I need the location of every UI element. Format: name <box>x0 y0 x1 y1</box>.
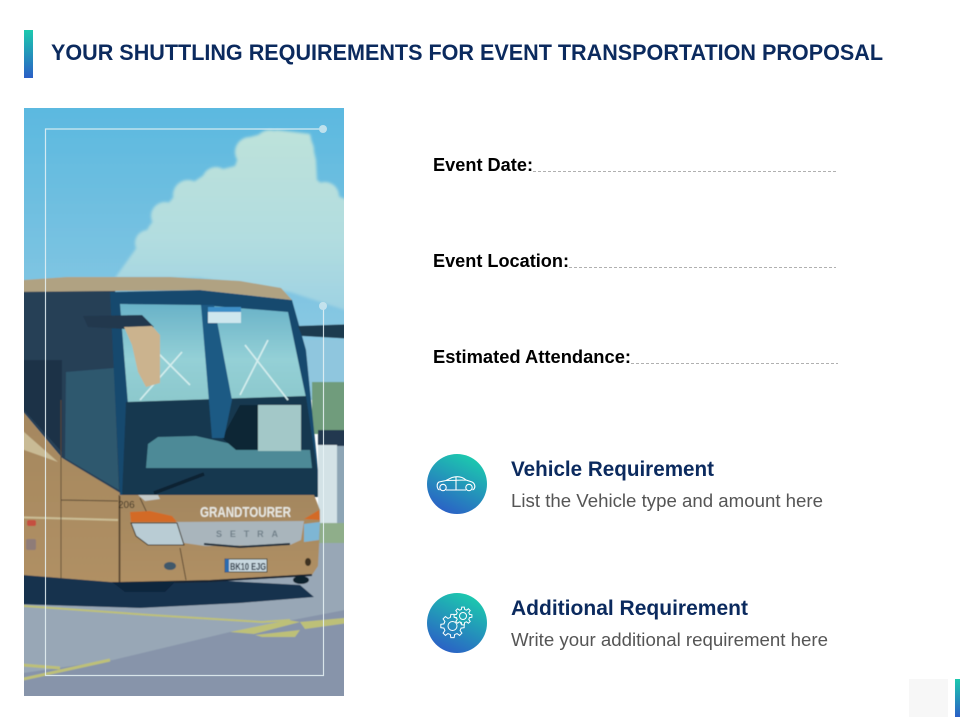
sky <box>24 108 344 341</box>
wiper base trim <box>138 495 160 501</box>
text: additional requirement: Additional Requirement <box>511 597 748 620</box>
cloud <box>115 130 360 315</box>
photo frame overlay <box>46 125 327 676</box>
bus shadow <box>24 574 314 608</box>
bus dark upper side <box>24 290 120 494</box>
corner accent bar <box>955 679 960 717</box>
text: additional requirement <box>511 597 828 650</box>
roof <box>10 277 292 300</box>
title accent bar <box>24 30 33 78</box>
number plate <box>225 559 267 572</box>
door glass <box>65 368 119 490</box>
photo panel: tour bus: BK10 EJG <box>230 562 266 573</box>
field: event date: Event Date: <box>433 155 533 175</box>
text: additional requirement: Write your additional requirement here <box>511 630 828 650</box>
dark lower windshield <box>122 396 318 497</box>
windshield glass <box>120 304 306 404</box>
seat reflection <box>146 436 312 468</box>
bus number: 206 <box>118 500 135 511</box>
title: YOUR SHUTTLING REQUIREMENTS FOR EVENT TRANSPORTATION PROPOSAL <box>51 40 883 65</box>
windshield pillar <box>201 305 232 438</box>
bottom dark lip <box>120 575 312 583</box>
bus body seams <box>120 496 186 582</box>
field: event location: Event Location: <box>433 251 569 271</box>
grille slot <box>204 544 290 547</box>
bus body side <box>24 412 121 583</box>
road markings <box>10 605 290 622</box>
front wheel shadow <box>112 582 175 592</box>
building reflection <box>258 405 301 451</box>
asphalt <box>10 543 355 708</box>
parking sticker <box>207 311 242 324</box>
fog lamp <box>164 562 176 570</box>
right mirror arm <box>298 324 344 339</box>
background scenery <box>306 350 344 400</box>
text: vehicle requirement <box>511 458 823 511</box>
reflection lines <box>140 340 288 400</box>
page number box <box>909 679 948 717</box>
left mirror arm <box>83 315 154 329</box>
windshield frame <box>110 290 318 497</box>
side lights <box>27 520 36 526</box>
bus brand lettering: GRANDTOURER <box>200 504 291 521</box>
photo panel: tour bus <box>24 108 344 696</box>
text: vehicle requirement: Vehicle Requirement <box>511 458 714 481</box>
bus front body <box>120 495 320 583</box>
left mirror <box>124 326 160 387</box>
left headlight <box>130 511 177 522</box>
wiper blade <box>154 474 204 493</box>
icon: car <box>427 454 487 514</box>
field: estimated attendance: Estimated Attendance: <box>433 347 631 367</box>
right headlight <box>304 510 320 520</box>
icon: gears <box>427 593 487 653</box>
band lettering: SETRA <box>216 529 278 539</box>
text: vehicle requirement: List the Vehicle type and amount here <box>511 491 823 511</box>
silver front band <box>176 521 304 546</box>
